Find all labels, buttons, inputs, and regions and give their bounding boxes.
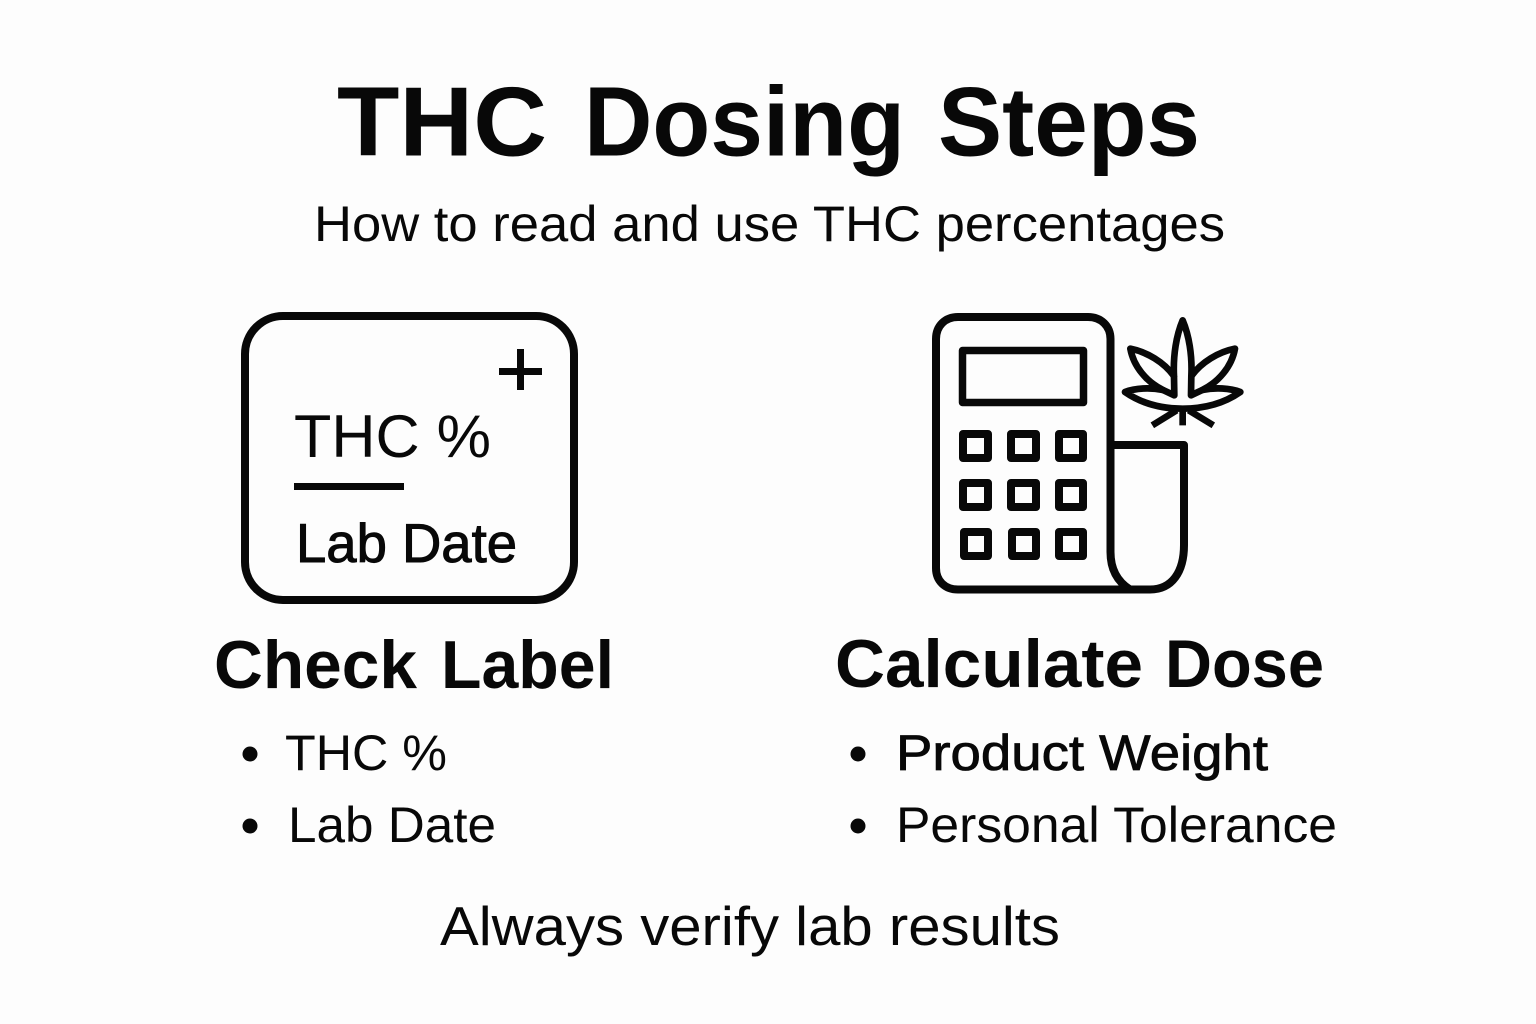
heading: calculate dose: [835, 626, 1324, 702]
label text: THC %: THC %: [294, 403, 491, 470]
subtitle: How to read and use THC percentages: [314, 196, 1225, 252]
list: check label items: Lab Date: [288, 797, 496, 853]
label text: Lab Date: Lab Date: [296, 512, 517, 574]
list: calculate dose items: [850, 725, 1337, 853]
icon: calculator with paper roll: [936, 317, 1184, 590]
heading: calculate dose: Dose: [1165, 626, 1324, 702]
title: [337, 66, 1200, 176]
title: THC: [337, 66, 547, 176]
panel: check label: [214, 316, 614, 853]
heading: check label: Label: [441, 627, 614, 703]
list: check label items: THC %: [285, 725, 447, 781]
title: Steps: [938, 66, 1200, 176]
list: calculate dose items: Product Weight: [896, 725, 1268, 781]
heading: check label: [214, 627, 614, 703]
icon: product label: [245, 316, 574, 600]
list: calculate dose items: Personal Tolerance: [896, 797, 1337, 853]
icon: plus sign: [499, 349, 542, 390]
heading: check label: Check: [214, 627, 417, 703]
footer note: Always verify lab results: [440, 895, 1060, 957]
panel: calculate dose: [835, 317, 1337, 853]
icon: cannabis leaf: [1125, 320, 1240, 425]
heading: calculate dose: Calculate: [835, 626, 1143, 702]
title: Dosing: [584, 66, 905, 176]
list: check label items: [242, 725, 496, 853]
